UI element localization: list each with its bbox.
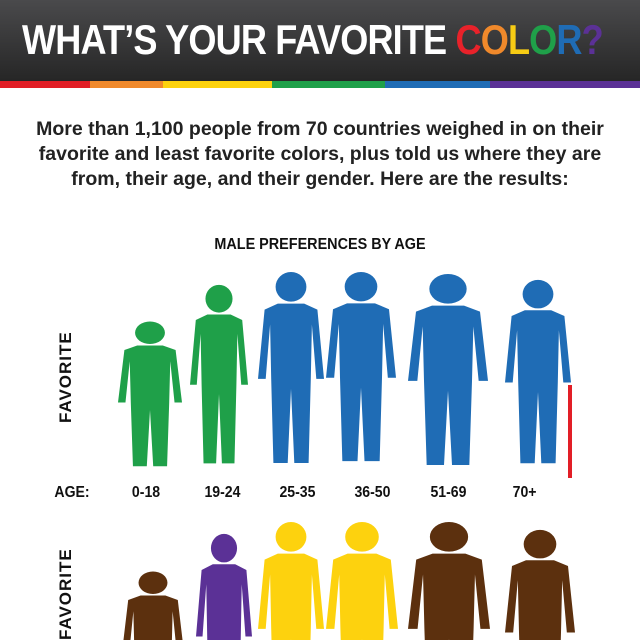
figure 25-35 blue (258, 272, 324, 463)
subheading: MALE PREFERENCES BY AGE (214, 236, 426, 253)
intro text: from, their age, and their gender. Here are the results: (71, 168, 569, 190)
figure 36-50 blue (326, 272, 396, 461)
age labels: 36-50 (354, 484, 390, 501)
row 2 figure 0-18 brown (122, 572, 184, 640)
row 2 figure 51-69 brown (408, 522, 490, 640)
intro text: More than 1,100 people from 70 countries weighed in on their (36, 118, 604, 140)
row 2 figure 36-50 yellow (326, 522, 398, 640)
title: WHAT’S YOUR FAVORITE COLOR? (22, 16, 603, 63)
figure 70+ blue/red (505, 280, 572, 478)
age labels: 70+ (513, 484, 537, 501)
figures chart (118, 272, 575, 640)
age labels: 25-35 (279, 484, 315, 501)
age labels: AGE: (54, 484, 90, 501)
age labels: 19-24 (204, 484, 240, 501)
age labels (54, 484, 537, 501)
rainbow stripe (0, 81, 640, 88)
intro text (36, 118, 604, 190)
figure 19-24 green/blue (190, 285, 248, 463)
age labels: 51-69 (430, 484, 466, 501)
row 2 figure 25-35 yellow (258, 522, 324, 640)
row label: least favorite: FAVORITE (56, 548, 75, 640)
row label: favorite: FAVORITE (56, 331, 75, 423)
figure 51-69 blue (408, 274, 488, 465)
age labels: 0-18 (132, 484, 160, 501)
figure 0-18 green (118, 322, 182, 466)
row 2 figure 19-24 purple (196, 534, 252, 640)
row 2 figure 70+ brown (505, 530, 575, 640)
intro text: favorite and least favorite colors, plus told us where they are (39, 143, 601, 165)
header bar (0, 0, 640, 81)
